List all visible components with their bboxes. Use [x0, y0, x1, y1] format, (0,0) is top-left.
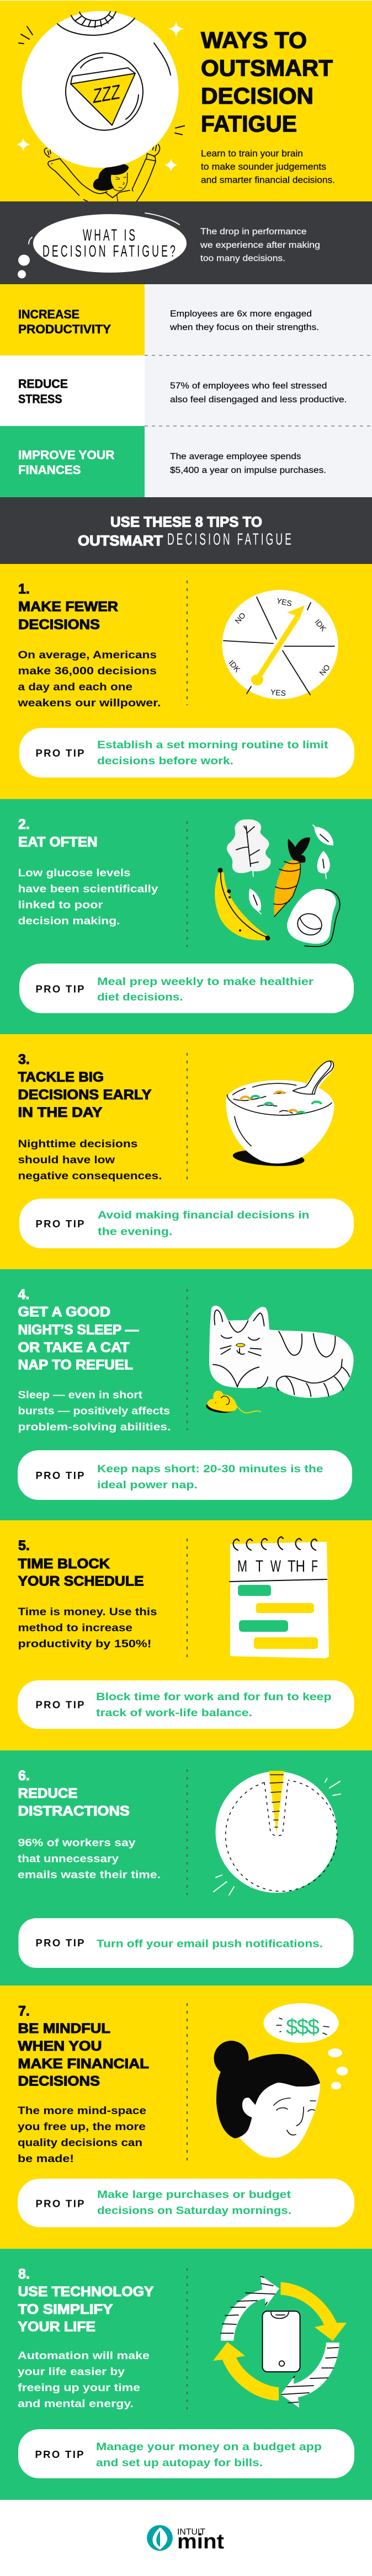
row: reduce stress: REDUCE: [18, 377, 68, 391]
pro tip: ideal power nap.: [97, 1479, 198, 1491]
body text: make 36,000 decisions: [18, 665, 157, 677]
row: increase productivity: Employees are 6x more engaged: [170, 309, 312, 319]
row: reduce stress: STRESS: [18, 392, 62, 406]
icon: decision spinner: IDK: [313, 618, 328, 634]
body text: [17, 649, 161, 709]
pro tip: PRO TIP: [35, 1218, 84, 1230]
heading: 1.: [18, 582, 30, 597]
heading: 2.: [18, 817, 30, 832]
icon: decision spinner: YES: [270, 688, 286, 698]
panel: tips heading: USE THESE 8 TIPS TO: [110, 513, 262, 530]
panel: tip 8: [0, 2249, 372, 2500]
icon: weekly calendar: T: [256, 1557, 263, 1576]
illustration: woman holding ball: [44, 145, 160, 201]
heading: [18, 817, 97, 850]
body text: have been scientifically: [18, 883, 158, 895]
heading: [18, 1538, 144, 1589]
pro tip: PRO TIP: [35, 983, 84, 994]
icon: decision spinner: YES: [276, 596, 293, 608]
heading: BE MINDFUL: [18, 2021, 110, 2036]
heading: GET A GOOD: [18, 1305, 110, 1320]
panel: tip 6: [0, 1750, 372, 1986]
pro tip: [18, 2429, 354, 2478]
definition text: too many decisions.: [200, 254, 285, 263]
pro tip: PRO TIP: [35, 1470, 84, 1481]
heading: [18, 1052, 152, 1120]
body text: problem-solving abilities.: [18, 1421, 171, 1433]
icon: weekly calendar: F: [311, 1557, 318, 1576]
body text: freeing up your time: [18, 2382, 140, 2394]
heading: YOUR LIFE: [18, 2319, 95, 2334]
pro tip: Meal prep weekly to make healthier: [97, 976, 313, 988]
heading: 6.: [18, 1768, 30, 1784]
body text: should have low: [18, 1154, 115, 1166]
panel: tip 1: [0, 564, 372, 799]
heading: [18, 582, 118, 632]
heading: NIGHT’S SLEEP —: [18, 1322, 139, 1338]
pro tip: [19, 728, 354, 778]
body text: [18, 1138, 162, 1182]
icon: ball: [22, 11, 179, 168]
row: improve your finances: $5,400 a year on impulse purchases.: [170, 466, 326, 475]
body text: method to increase: [18, 1622, 132, 1634]
heading: MAKE FEWER: [18, 599, 118, 615]
pro tip: [18, 1680, 354, 1729]
row: improve your finances: [18, 448, 326, 477]
icon: sleeping cat and mouse: [206, 1306, 354, 1414]
panel: tip 2: [0, 799, 372, 1034]
heading: 4.: [18, 1287, 29, 1302]
panel: benefits table: [0, 284, 372, 497]
heading: DECISIONS: [18, 617, 100, 632]
heading: WHEN YOU: [18, 2039, 102, 2054]
icon: woman thinking about money: [214, 2003, 348, 2158]
icon: weekly calendar: TH: [288, 1557, 305, 1576]
row: improve your finances: IMPROVE YOUR: [18, 448, 115, 462]
body text: you free up, the more: [18, 2121, 146, 2133]
body text: [18, 2350, 150, 2410]
body text: [18, 867, 158, 927]
title: FATIGUE: [201, 110, 297, 137]
pro tip: the evening.: [98, 1226, 172, 1238]
row: reduce stress: [18, 377, 347, 406]
icon: decision spinner: NO: [233, 611, 247, 625]
body text: Sleep — even in short: [18, 1389, 143, 1401]
thought bubble: WHAT IS: [83, 226, 137, 244]
definition text: The drop in performance: [200, 227, 307, 236]
subtitle: and smarter financial decisions.: [201, 174, 335, 185]
pro tip: PRO TIP: [35, 2197, 84, 2210]
body text: linked to poor: [18, 899, 103, 911]
pro tip: PRO TIP: [35, 1699, 84, 1711]
subtitle: to make sounder judgements: [201, 161, 326, 172]
body text: [18, 1606, 157, 1650]
icon: healthy food: [215, 819, 340, 946]
subtitle: Learn to train your brain: [201, 148, 303, 159]
row: reduce stress: 57% of employees who feel stressed: [170, 381, 327, 391]
heading: DECISIONS: [18, 2074, 100, 2089]
heading: IN THE DAY: [18, 1105, 103, 1120]
title: [201, 27, 333, 137]
heading: TO SIMPLIFY: [18, 2302, 113, 2317]
icon: cereal bowl: [226, 1061, 334, 1168]
heading: REDUCE: [18, 1786, 77, 1801]
body text: negative consequences.: [18, 1170, 162, 1182]
logo: intuit mint: INTUIT: [177, 2527, 205, 2537]
row: improve your finances: The average employee spends: [170, 452, 301, 461]
panel: tip 7: [0, 1986, 372, 2249]
panel: tip 4: [0, 1269, 372, 1520]
row: increase productivity: when they focus on their strengths.: [169, 323, 319, 332]
pro tip: Keep naps short: 20-30 minutes is the: [97, 1463, 323, 1475]
hero panel: [0, 1, 372, 201]
icon: weekly calendar: W: [270, 1557, 281, 1576]
heading: 7.: [18, 2003, 30, 2019]
body text: weakens our willpower.: [17, 697, 161, 709]
row: improve your finances: FINANCES: [18, 463, 81, 477]
body text: [18, 1837, 161, 1881]
pro tip: PRO TIP: [35, 1937, 84, 1949]
pro tip: PRO TIP: [35, 2449, 84, 2460]
body text: productivity by 150%!: [18, 1638, 151, 1650]
row: increase productivity: [18, 307, 319, 336]
panel: tips heading: OUTSMART: [78, 532, 163, 549]
icon: phone with cycling arrows: [213, 2275, 347, 2408]
pro tip: Turn off your email push notifications.: [97, 1938, 323, 1950]
heading: NAP TO REFUEL: [18, 1358, 133, 1373]
heading: 8.: [18, 2266, 30, 2282]
title: WAYS TO: [201, 27, 307, 53]
pro tip: and set up autopay for bills.: [96, 2457, 263, 2469]
pro tip: [18, 1450, 352, 1500]
heading: 3.: [18, 1052, 30, 1067]
pro tip: Manage your money on a budget app: [96, 2441, 322, 2453]
body text: On average, Americans: [18, 649, 157, 661]
pro tip: diet decisions.: [97, 991, 183, 1003]
body text: that unnecessary: [18, 1853, 119, 1865]
title: DECISION: [201, 83, 313, 109]
pro tip: track of work-life balance.: [96, 1707, 252, 1719]
icon: weekly calendar: [230, 1537, 329, 1658]
logo: intuit mint: [147, 2525, 224, 2553]
heading: [18, 2266, 154, 2334]
heading: USE TECHNOLOGY: [18, 2284, 154, 2300]
icon: sparkles: [17, 21, 184, 172]
heading: OR TAKE A CAT: [18, 1340, 129, 1355]
decorative ticks: [19, 26, 184, 135]
pro tip: Avoid making financial decisions in: [98, 1209, 309, 1221]
icon: decision spinner: NO: [317, 663, 332, 677]
body text: a day and each one: [18, 681, 132, 693]
body text: [18, 1389, 171, 1433]
thought bubble: DECISION FATIGUE?: [42, 242, 178, 260]
body text: decision making.: [18, 915, 120, 927]
body text: quality decisions can: [18, 2137, 142, 2149]
icon: decision spinner: IDK: [227, 658, 242, 674]
panel: tip 5: [0, 1520, 372, 1750]
pro tip: decisions on Saturday mornings.: [97, 2205, 291, 2217]
icon: decision spinner: [222, 590, 338, 699]
icon: woman thinking about money: $$$: [286, 2015, 320, 2039]
body text: 96% of workers say: [18, 1837, 136, 1849]
heading: MAKE FINANCIAL: [18, 2056, 149, 2072]
panel: what is decision fatigue: [0, 201, 372, 284]
definition text: we experience after making: [200, 241, 320, 250]
heading: TIME BLOCK: [18, 1556, 110, 1572]
pro tip: [19, 1918, 353, 1968]
text: ZZZ: ZZZ: [93, 80, 120, 108]
thought bubble: [18, 213, 187, 278]
icon: weekly calendar: M: [237, 1557, 247, 1576]
pro tip: PRO TIP: [35, 747, 84, 759]
row: reduce stress: also feel disengaged and less productive.: [170, 395, 347, 405]
body text: The more mind-space: [18, 2105, 146, 2117]
heading: [18, 1768, 130, 1819]
body text: bursts — positively affects: [18, 1405, 170, 1417]
panel: tips heading: [0, 497, 372, 564]
heading: YOUR SCHEDULE: [18, 1574, 144, 1589]
heading: DECISIONS EARLY: [18, 1087, 152, 1103]
definition text: [200, 227, 320, 263]
pro tip: [18, 2179, 354, 2227]
pro tip: [19, 1199, 354, 1248]
pro tip: [19, 964, 354, 1013]
pro tip: Block time for work and for fun to keep: [96, 1691, 332, 1703]
body text: Time is money. Use this: [18, 1606, 157, 1618]
pro tip: Establish a set morning routine to limit: [97, 739, 328, 751]
pro tip: Make large purchases or budget: [97, 2189, 291, 2201]
row: increase productivity: INCREASE: [18, 307, 79, 321]
body text: Automation will make: [18, 2350, 150, 2362]
heading: [18, 1287, 139, 1373]
icon: clock with wedge: [214, 1771, 341, 1895]
body text: your life easier by: [18, 2366, 125, 2378]
body text: Nighttime decisions: [18, 1138, 138, 1150]
subtitle: [201, 148, 335, 185]
logo: intuit mint: mint: [177, 2530, 224, 2553]
body text: and mental energy.: [18, 2398, 134, 2410]
panel: tip 3: [0, 1034, 372, 1269]
heading: EAT OFTEN: [18, 834, 97, 850]
row: increase productivity: PRODUCTIVITY: [18, 322, 111, 336]
heading: TACKLE BIG: [18, 1069, 104, 1085]
heading: 5.: [18, 1538, 30, 1553]
body text: Low glucose levels: [18, 867, 131, 879]
heading: [18, 2003, 149, 2089]
pro tip: decisions before work.: [97, 755, 233, 767]
title: OUTSMART: [201, 55, 333, 81]
body text: be made!: [18, 2153, 74, 2165]
body text: [18, 2105, 146, 2165]
body text: emails waste their time.: [18, 1869, 161, 1881]
heading: DISTRACTIONS: [18, 1803, 130, 1819]
